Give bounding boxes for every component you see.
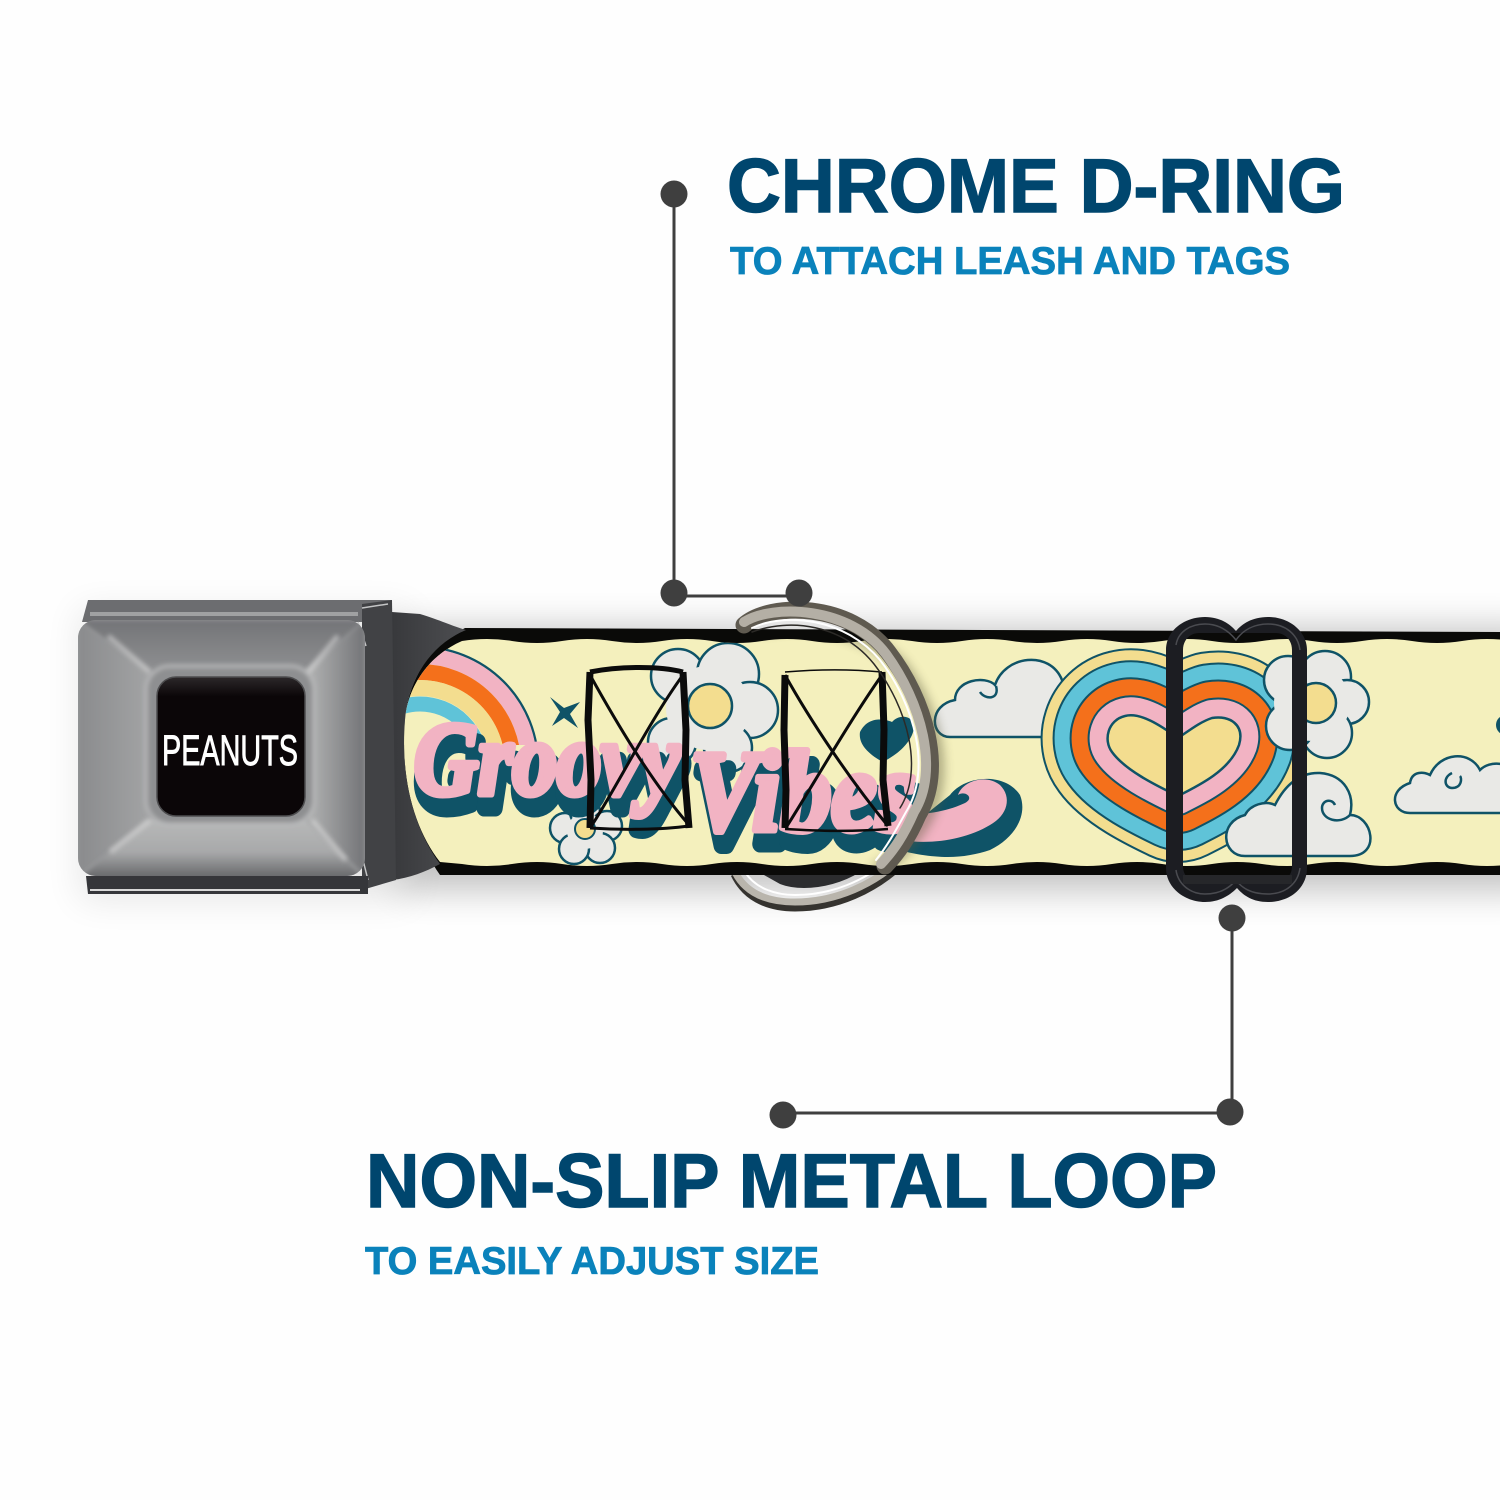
Groovy Vibes lettering bbox=[414, 722, 920, 854]
subheading: TO EASILY ADJUST SIZE bbox=[365, 1240, 819, 1283]
buckle face bbox=[78, 620, 365, 880]
leader line bbox=[770, 904, 1246, 1128]
logo text: PEANUTS bbox=[162, 727, 298, 775]
D-ring lower part bbox=[735, 855, 905, 907]
small heart bbox=[860, 717, 914, 762]
leader line bbox=[660, 180, 812, 606]
bevel highlight bbox=[108, 636, 346, 860]
strap underside bbox=[755, 870, 860, 888]
strap black edge bbox=[404, 628, 1500, 875]
stitching bbox=[588, 668, 888, 831]
lettering fill bbox=[414, 722, 916, 835]
ring shadow on strap bbox=[838, 639, 950, 866]
subheading: TO ATTACH LEASH AND TAGS bbox=[730, 240, 1290, 283]
strap anchor bbox=[392, 612, 466, 880]
flower top bbox=[648, 643, 778, 772]
bottom highlight bbox=[90, 889, 360, 891]
slider inner highlight bbox=[1176, 624, 1300, 894]
D-ring upper part bbox=[744, 610, 930, 866]
lettering fill: Vibes bbox=[690, 728, 916, 855]
lettering shadow: Groovy bbox=[418, 716, 685, 831]
cloud right bbox=[1395, 756, 1500, 813]
bevel right bbox=[305, 620, 365, 876]
rim highlight bbox=[90, 612, 358, 616]
heading: NON-SLIP METAL LOOP bbox=[366, 1139, 1217, 1224]
callout: metal loop bbox=[365, 904, 1246, 1283]
buckle side housing bbox=[362, 600, 396, 890]
slider lower band bbox=[1183, 875, 1292, 884]
housing highlight bbox=[358, 604, 388, 880]
bevel left bbox=[78, 620, 150, 876]
rainbow left bbox=[404, 649, 537, 745]
cloud middle bbox=[935, 660, 1075, 737]
flower right bbox=[1264, 651, 1369, 758]
recess frame bbox=[146, 666, 314, 824]
small flower bbox=[550, 797, 622, 864]
callout: chrome d-ring bbox=[660, 144, 1345, 606]
black logo badge bbox=[157, 677, 305, 816]
metal loop slider bbox=[1166, 617, 1307, 902]
heading: CHROME D-RING bbox=[727, 144, 1345, 229]
lettering shadow: Vibes bbox=[695, 742, 921, 869]
cloud lower bbox=[1226, 773, 1370, 856]
buckle top rim bbox=[82, 600, 392, 622]
star bbox=[550, 697, 580, 728]
rainbow heart bbox=[1108, 715, 1240, 796]
strap print bbox=[404, 639, 1500, 866]
soft shadow behind collar bbox=[80, 610, 1500, 900]
lettering shadow bbox=[414, 733, 920, 854]
bevel bottom bbox=[84, 818, 358, 876]
buckle bottom rim bbox=[86, 876, 368, 894]
swash shadow bbox=[907, 778, 1022, 857]
seatbelt buckle bbox=[78, 600, 466, 894]
collar strap bbox=[404, 628, 1500, 875]
swash pink bbox=[914, 779, 1007, 842]
edge motif right bbox=[1496, 717, 1500, 733]
lettering fill: Groovy bbox=[414, 702, 681, 817]
strap base colour bbox=[400, 630, 1500, 875]
bevel top bbox=[84, 620, 360, 668]
